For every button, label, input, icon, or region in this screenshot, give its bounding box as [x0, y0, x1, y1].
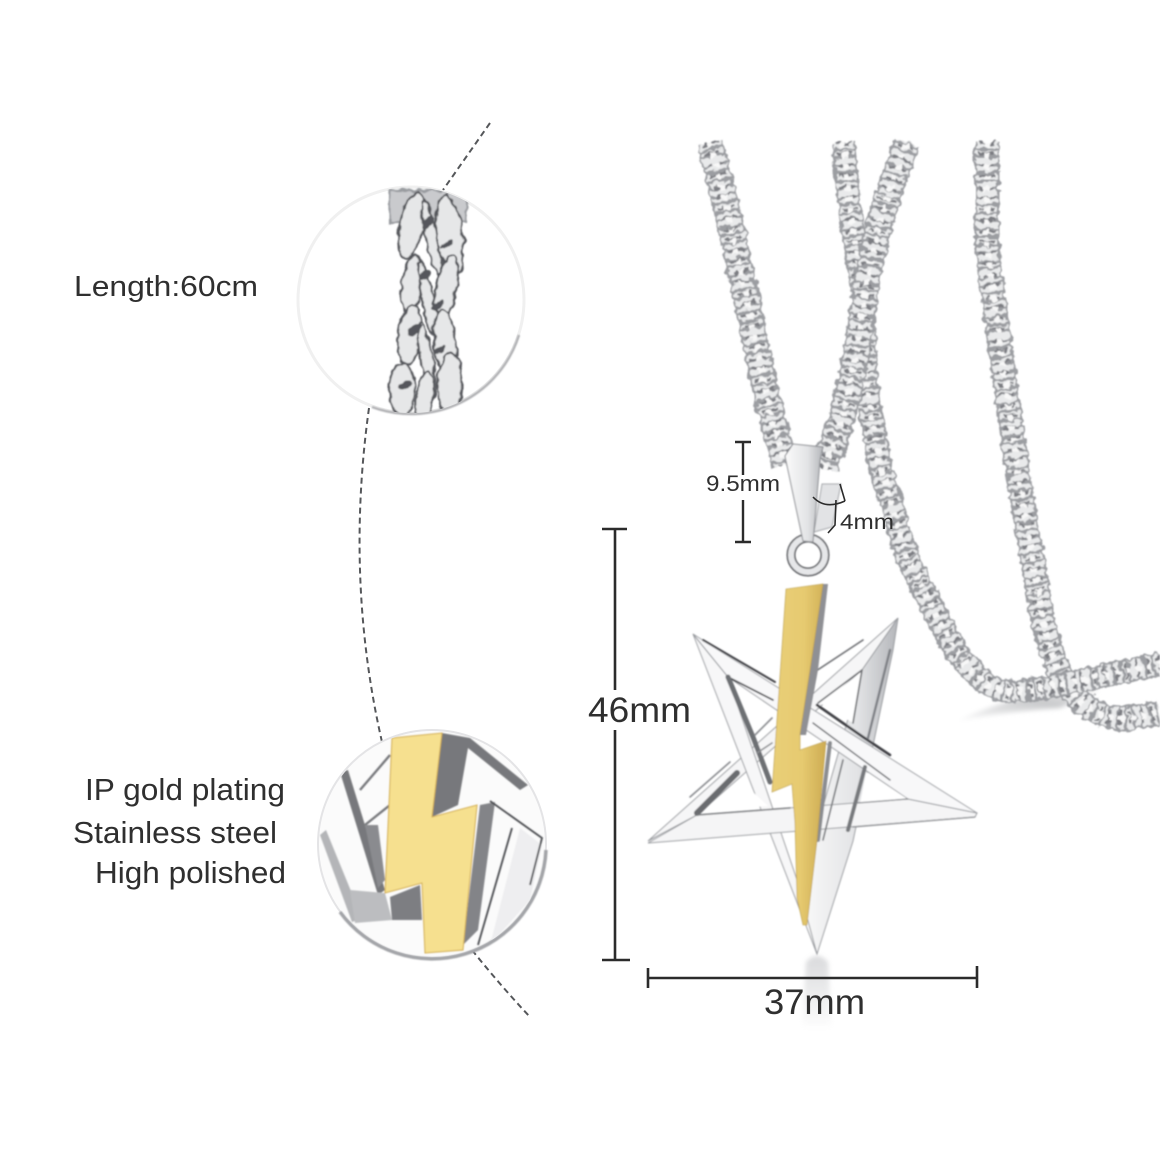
- gold bolt magnified: [385, 733, 477, 953]
- label 46mm: 46mm: [588, 691, 691, 730]
- gold lightning bolt: [772, 584, 826, 925]
- dimension: width 37mm: [648, 966, 977, 1022]
- label line: Stainless steel: Stainless steel: [73, 815, 277, 850]
- jump ring: [791, 538, 825, 572]
- hole: upper right: [820, 672, 862, 723]
- connector: necklace to chain detail: [443, 123, 490, 190]
- dark facet left: [340, 770, 385, 895]
- star band: upper right to bottom: [797, 618, 898, 954]
- bail front: [785, 444, 823, 542]
- chain strand: far right: [987, 142, 1160, 718]
- connector: pendant detail to lower edge: [472, 950, 530, 1017]
- label line: IP gold plating: IP gold plating: [85, 772, 285, 807]
- circle outline: [298, 187, 524, 413]
- dark facet centre right: [463, 802, 495, 945]
- dimension: bail height 9.5mm: [706, 442, 780, 542]
- thin edge upper left: [360, 755, 390, 825]
- dashed connector lines: [360, 123, 530, 1017]
- label: chain length: Length:60cm: [74, 271, 258, 303]
- dark facet left lower: [365, 825, 385, 888]
- star band: upper left to bottom: [693, 634, 817, 954]
- necklace chain: [710, 142, 1160, 718]
- pendant detail circle: [318, 730, 546, 959]
- star band: lower left to upper right: [648, 618, 898, 841]
- pendant: [648, 444, 977, 954]
- reflection under pendant: [802, 956, 832, 1030]
- dark facet under bolt: [390, 885, 422, 920]
- label line: High polished: High polished: [95, 855, 286, 890]
- dimension: bail width 4mm: [813, 484, 894, 534]
- speckled facet bottom left: [350, 890, 392, 923]
- star band: right to left: [648, 799, 977, 843]
- dimension: height 46mm: [588, 529, 691, 960]
- shaded band far left: [320, 830, 356, 922]
- star inner holes: [714, 672, 906, 810]
- magnified chain links: [389, 189, 468, 423]
- thin edge right: [478, 801, 542, 945]
- hole: lower right: [860, 772, 906, 803]
- label: material and finish: [73, 772, 286, 890]
- star engraved edges: [690, 640, 975, 840]
- connector: chain detail to pendant detail: [360, 408, 382, 742]
- circle lower shadow arc: [372, 335, 519, 414]
- circle background: [318, 730, 546, 958]
- bail back: [814, 484, 841, 532]
- hole: lower left: [714, 780, 768, 810]
- star bands: [648, 618, 977, 954]
- label 4mm: 4mm: [840, 511, 894, 534]
- chain strand: left to bail: [710, 142, 785, 465]
- label 9.5mm: 9.5mm: [706, 471, 780, 496]
- jump ring highlight: [791, 538, 825, 572]
- gold bolt side edge: [800, 584, 828, 735]
- circle lower shadow arc: [340, 850, 546, 959]
- light panel right: [490, 828, 542, 945]
- label 37mm: 37mm: [764, 983, 865, 1022]
- floor shadow: [955, 690, 1100, 722]
- star band: upper left to right: [693, 634, 977, 813]
- magnified star and bolt: [320, 733, 542, 953]
- dark facet upper right: [432, 733, 528, 817]
- chain strand: middle long: [843, 142, 1160, 691]
- chain detail circle: [298, 187, 524, 423]
- chain strand: right to bail: [825, 142, 907, 468]
